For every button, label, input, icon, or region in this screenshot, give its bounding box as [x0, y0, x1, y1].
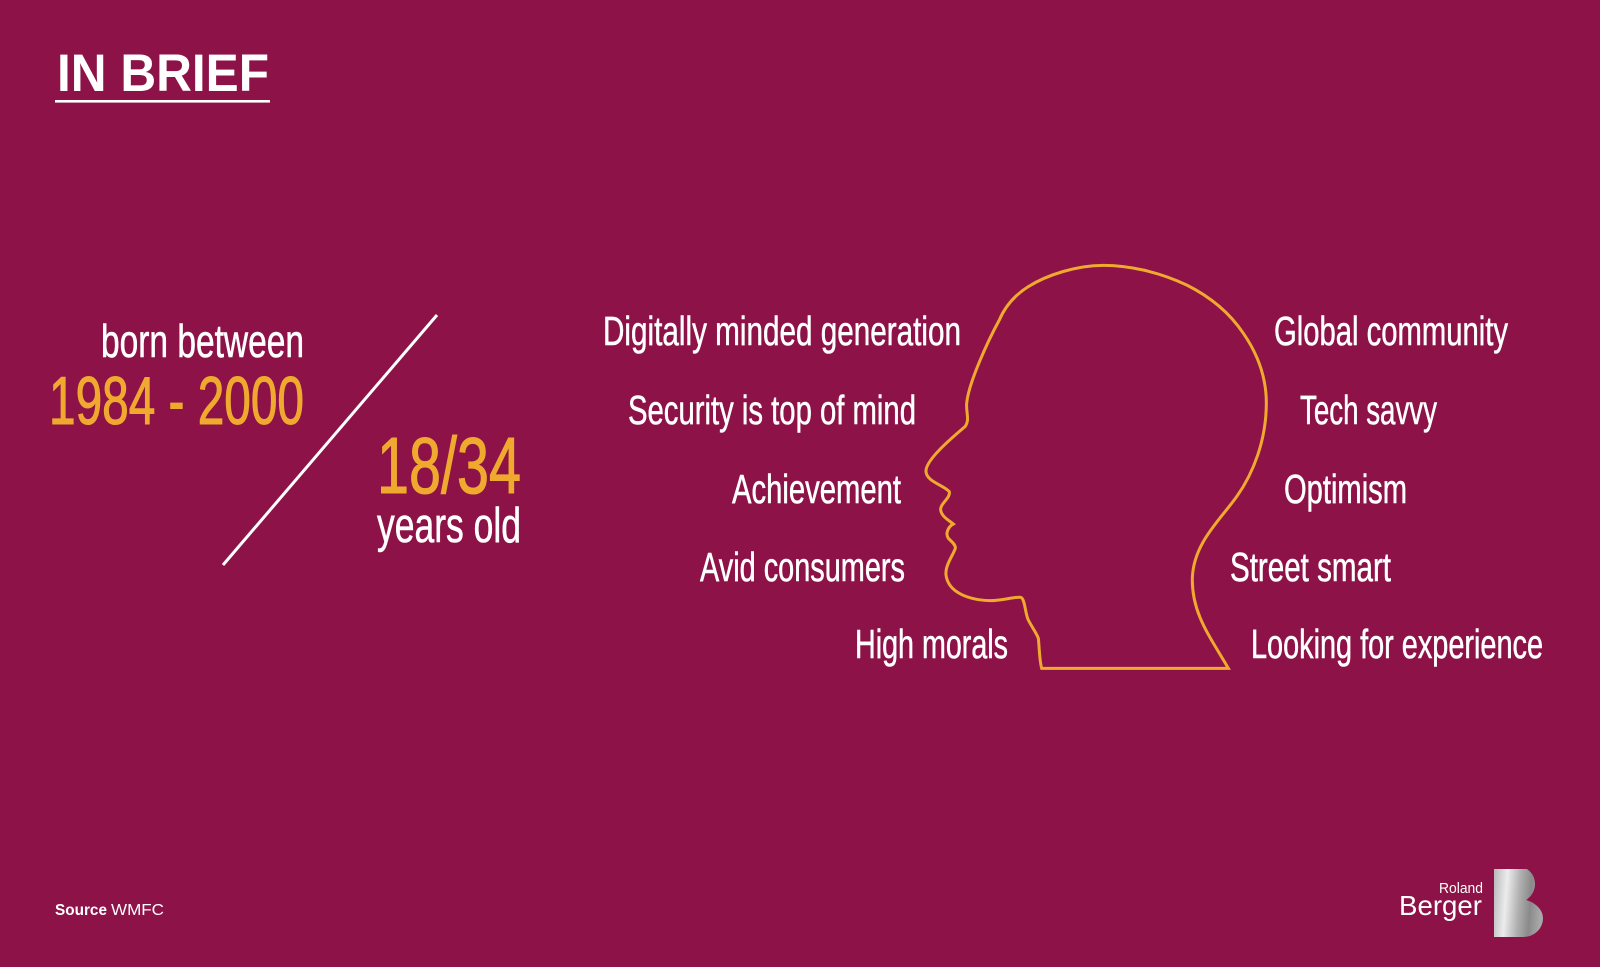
label: Optimism: Optimism: [1284, 466, 1407, 512]
icon: head profile outline: [926, 265, 1266, 668]
source note: WMFC: [111, 902, 164, 919]
label: High morals: High morals: [855, 621, 1008, 667]
logo: Roland Berger: Berger: [1399, 890, 1482, 921]
panel: traits left of head: [603, 308, 1008, 667]
logo: Roland Berger: Roland: [1439, 881, 1483, 897]
number: 18/34: 18/34: [377, 421, 521, 510]
label: Digitally minded generation: Digitally minded generation: [603, 308, 961, 354]
label: Avid consumers: Avid consumers: [700, 544, 905, 590]
logo: Roland Berger: [1399, 869, 1543, 937]
panel: age and birth years: [49, 315, 521, 565]
source note: [55, 902, 164, 919]
label: Global community: Global community: [1274, 308, 1508, 354]
text: years old: years old: [377, 499, 521, 553]
panel: traits right of head: [1230, 308, 1543, 667]
divider slash: [223, 315, 437, 565]
text: born between: born between: [101, 315, 304, 367]
label: Achievement: Achievement: [732, 466, 901, 512]
label: Street smart: Street smart: [1230, 544, 1391, 590]
label: Tech savvy: Tech savvy: [1300, 387, 1437, 433]
title: IN BRIEF: [57, 44, 269, 103]
icon: metallic B: [1494, 869, 1543, 937]
number: 1984 - 2000: 1984 - 2000: [49, 363, 304, 439]
source note: Source: [55, 902, 107, 919]
label: Security is top of mind: Security is top of mind: [628, 387, 916, 433]
